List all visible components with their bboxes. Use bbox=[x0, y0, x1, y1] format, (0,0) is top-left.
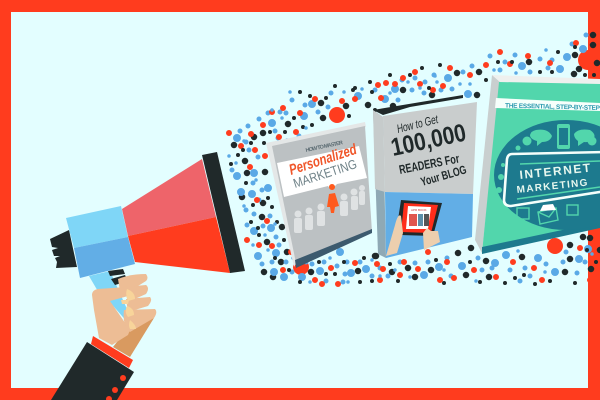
monitor text bbox=[516, 161, 592, 196]
banner text: THE ESSENTIAL, STEP-BY-STEP bbox=[505, 103, 600, 112]
horn upper bbox=[122, 159, 216, 236]
bottom strip bbox=[482, 222, 600, 254]
bottom icons bbox=[517, 205, 578, 224]
tablet illustration: APR BOOK bbox=[411, 208, 427, 212]
horn lower bbox=[128, 217, 230, 273]
title text bbox=[287, 140, 359, 191]
monitor text: INTERNET bbox=[519, 161, 592, 182]
collar lower bbox=[74, 237, 135, 278]
book spine bbox=[266, 122, 366, 267]
silhouettes bbox=[294, 185, 365, 233]
book cover bbox=[383, 102, 477, 194]
top icons bbox=[516, 124, 596, 150]
cuff buttons bbox=[106, 375, 126, 400]
blue panel bbox=[385, 192, 473, 258]
book top edge bbox=[373, 95, 463, 115]
bottom strip bbox=[295, 229, 372, 268]
title text: Your BLOG bbox=[419, 162, 468, 189]
particle cloud bbox=[229, 35, 600, 284]
title text bbox=[388, 112, 469, 189]
wrist shadow bbox=[113, 318, 154, 357]
megaphone handle bbox=[89, 271, 131, 324]
book: personalized marketing bbox=[266, 122, 372, 268]
fingers bbox=[118, 274, 156, 332]
red cuff bbox=[91, 336, 133, 368]
horn rim bbox=[202, 152, 245, 273]
palm bbox=[92, 287, 130, 345]
book spine bbox=[373, 110, 386, 258]
megaphone bbox=[50, 152, 245, 324]
monitor bbox=[504, 152, 600, 211]
monitor text: MARKETING bbox=[516, 178, 588, 196]
black sleeve bbox=[51, 342, 134, 400]
collar upper bbox=[66, 206, 128, 248]
white banner bbox=[277, 146, 367, 197]
title text: How to Get bbox=[395, 112, 440, 136]
tablet illustration bbox=[396, 200, 442, 236]
hands bbox=[386, 215, 440, 256]
megaphone rear cap bbox=[50, 230, 77, 268]
title text: Personalized bbox=[287, 141, 359, 179]
title text: READERS For bbox=[398, 152, 461, 177]
book cover bbox=[272, 126, 372, 263]
side icons bbox=[496, 163, 505, 193]
book: 100,000 readers bbox=[373, 95, 477, 258]
fingernails bbox=[121, 289, 136, 329]
book cover bbox=[482, 82, 600, 253]
hand and sleeve bbox=[51, 274, 156, 400]
title text: MARKETING bbox=[291, 156, 359, 191]
teal circle bbox=[494, 120, 600, 230]
title text: HOW TO MASTER bbox=[305, 140, 344, 154]
title text: 100,000 bbox=[388, 119, 469, 162]
white banner bbox=[495, 98, 600, 111]
phone screen bbox=[559, 128, 568, 145]
megaphone switch bbox=[108, 269, 128, 285]
book: internet marketing bbox=[475, 75, 600, 254]
red figure bbox=[327, 184, 339, 213]
book spine bbox=[475, 75, 500, 253]
book top bbox=[492, 75, 600, 86]
